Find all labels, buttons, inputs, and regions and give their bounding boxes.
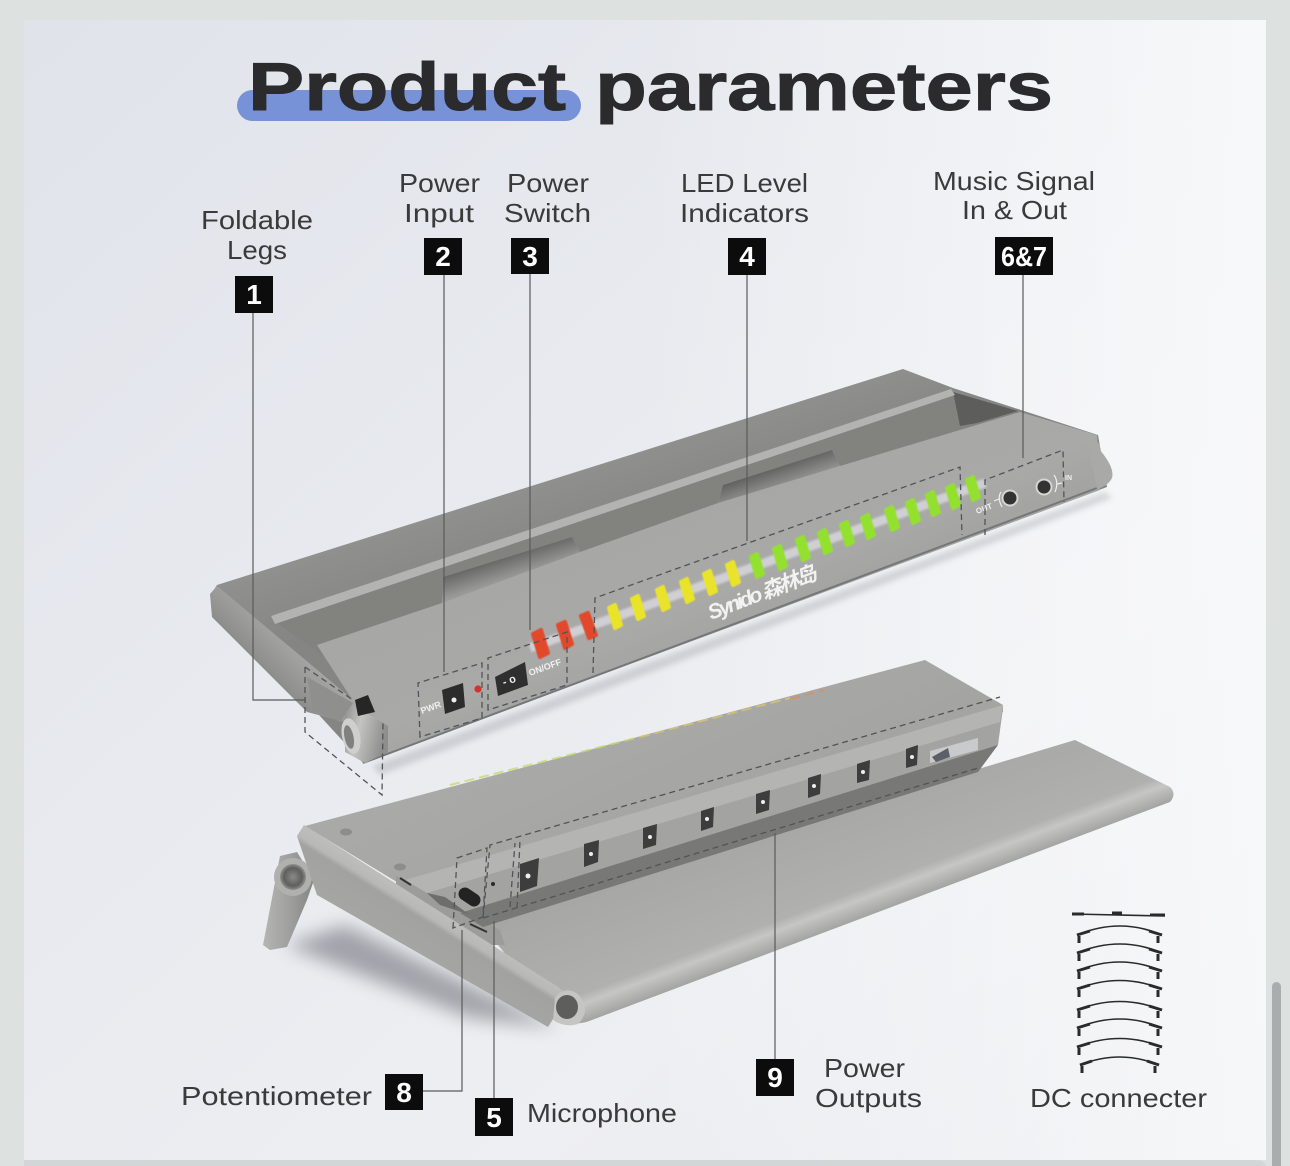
channel wall [412, 708, 1003, 927]
callout 6&7: Music Signal In & Out: Music Signal [933, 166, 1095, 196]
scrollbar [1272, 982, 1281, 1166]
product: lower device, rear view [263, 660, 1174, 1028]
green LED indicators [751, 477, 979, 577]
microphone hole [491, 882, 495, 886]
potentiometer knob [465, 894, 474, 900]
callout 3: Power Switch: 3 [522, 241, 538, 272]
dashed regions [453, 697, 1000, 928]
audio jacks: IN [1065, 475, 1072, 482]
power output ports [520, 745, 918, 892]
channel upper lip [405, 705, 1003, 893]
title text: Product [248, 49, 566, 125]
bottom edge [363, 488, 1097, 763]
rocker switch: ON/OFF [527, 657, 563, 678]
notches [442, 537, 580, 603]
title text: parameters [595, 49, 1053, 125]
title text [248, 49, 1053, 125]
callout 9: Power Outputs: Power [824, 1053, 905, 1083]
callout 8: Potentiometer [181, 930, 462, 1111]
brand logo: Synido 森林岛 [705, 562, 821, 625]
callout 6&7: Music Signal In & Out: 6&7 [1001, 241, 1047, 272]
callout 1: Foldable Legs [201, 205, 313, 700]
callout 9: Power Outputs: 9 [767, 1062, 783, 1093]
title highlight pill [237, 90, 581, 121]
callout 5: Microphone [475, 921, 677, 1136]
callout 3: Power Switch: Switch [504, 198, 591, 228]
label: DC connecter: DC connecter [1030, 1083, 1207, 1113]
callout 1: Foldable Legs: Foldable [201, 205, 313, 235]
light strip [530, 483, 985, 648]
callout 4: LED Level Indicators: LED Level [681, 168, 808, 198]
top plate [305, 660, 1003, 884]
callout 4: LED Level Indicators: Indicators [680, 198, 809, 228]
base plate [483, 740, 1174, 1024]
rating label [930, 738, 978, 763]
power socket [419, 683, 465, 716]
left side edge [210, 586, 358, 722]
hinge [307, 677, 388, 763]
back plate [210, 369, 1107, 763]
callout 2: Power Input [399, 168, 480, 672]
callout 4: LED Level Indicators: 4 [739, 241, 755, 272]
callout 2: Power Input: 2 [435, 241, 451, 272]
cast shadow [285, 925, 560, 1028]
callout 3: Power Switch [504, 168, 591, 630]
rail highlight [271, 389, 955, 624]
yellow LED indicators [609, 562, 739, 628]
callout 2: Power Input: Power [399, 168, 480, 198]
trough [275, 395, 1020, 660]
callout 5: Microphone: 5 [486, 1102, 502, 1133]
power socket: PWR [419, 699, 443, 716]
ground shadow [372, 492, 1112, 775]
callout 1: Foldable Legs: Legs [227, 235, 287, 265]
red LED indicators [533, 613, 596, 657]
icon: DC connector cables [1072, 913, 1165, 1073]
callout 2: Power Input: Input [404, 198, 475, 228]
callout 4: LED Level Indicators [680, 168, 809, 541]
callout 6&7: Music Signal In & Out [933, 166, 1095, 458]
LED light leak [450, 690, 825, 785]
dashed regions [305, 450, 1064, 795]
callout 8: Potentiometer: Potentiometer [181, 1081, 372, 1111]
power LED [474, 685, 482, 693]
channel left infill [396, 876, 505, 945]
rocker switch: - o [501, 673, 518, 689]
callout 5: Microphone: Microphone [527, 1098, 677, 1128]
callout 8: Potentiometer: 8 [396, 1077, 412, 1108]
audio jacks: OUT [975, 502, 994, 516]
top plate and front face [317, 412, 1100, 763]
screws [340, 828, 406, 870]
callout 9: Power Outputs [756, 833, 922, 1113]
title: Product parameters [237, 49, 1053, 125]
callout 1: Foldable Legs: 1 [246, 279, 262, 310]
end barrel [553, 990, 585, 1025]
right end cap [1090, 437, 1112, 489]
side band [297, 825, 568, 1027]
slot ends [400, 878, 487, 932]
callout 3: Power Switch: Power [507, 168, 589, 198]
callout 9: Power Outputs: Outputs [815, 1083, 922, 1113]
audio jacks [975, 475, 1072, 516]
channel dark band [460, 745, 998, 927]
callout 6&7: Music Signal In & Out: In & Out [962, 195, 1068, 225]
rocker switch [495, 657, 563, 696]
product: upper device, front view [210, 369, 1112, 795]
folding leg [263, 852, 314, 950]
